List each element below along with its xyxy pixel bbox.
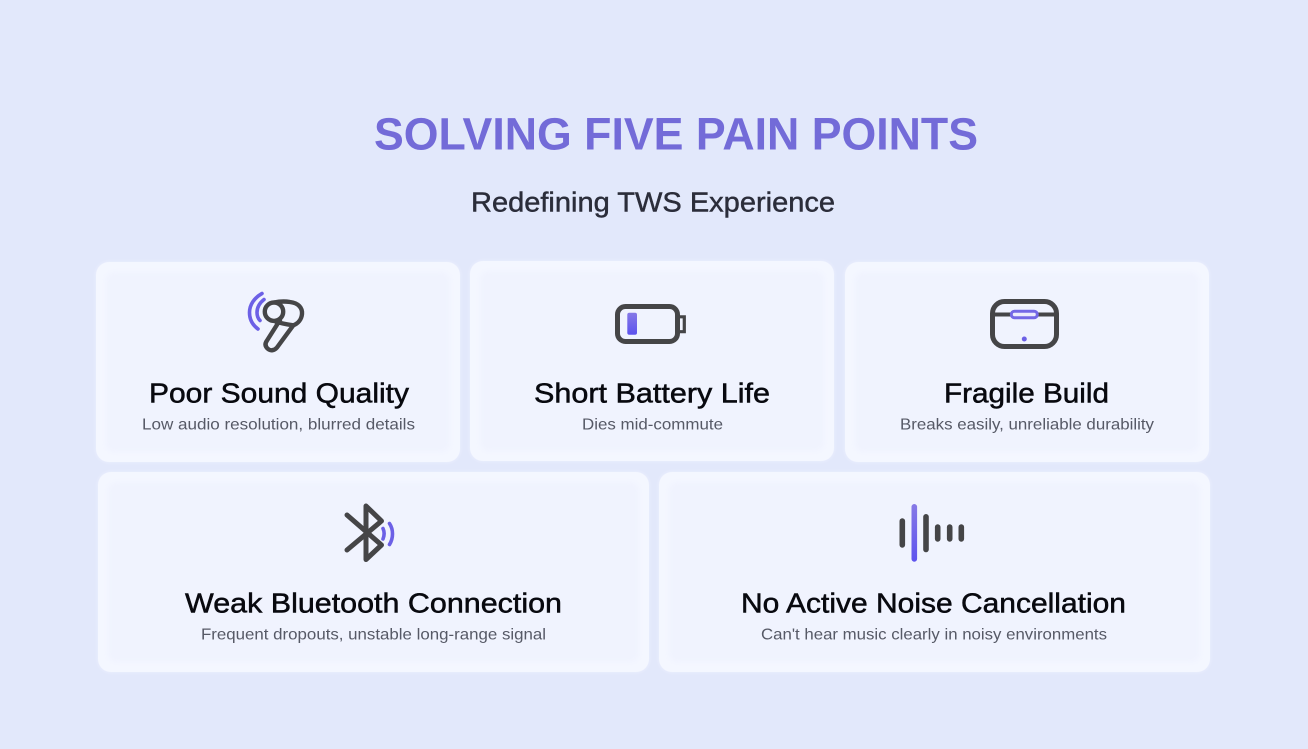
panel: poor sound quality <box>96 262 460 462</box>
heading: Poor Sound Quality <box>149 378 409 408</box>
description: Breaks easily, unreliable durability <box>900 416 1154 434</box>
title: SOLVING FIVE PAIN POINTS <box>374 108 978 160</box>
icon: sound bars <box>900 504 964 562</box>
description: Frequent dropouts, unstable long-range signal <box>201 626 546 644</box>
icon: earbud with sound waves <box>250 294 302 350</box>
panel: weak bluetooth connection <box>98 472 649 672</box>
subtitle: Redefining TWS Experience <box>471 186 835 218</box>
heading: Fragile Build <box>944 378 1109 408</box>
panel: no active noise cancellation <box>659 472 1210 672</box>
description: Can't hear music clearly in noisy environments <box>761 626 1107 644</box>
heading: Short Battery Life <box>534 378 770 408</box>
icon: low battery <box>618 306 684 342</box>
panel: short battery life <box>470 261 834 461</box>
description: Dies mid-commute <box>582 416 723 434</box>
panel: fragile build <box>845 262 1209 462</box>
description: Low audio resolution, blurred details <box>142 416 415 434</box>
heading: No Active Noise Cancellation <box>741 588 1126 618</box>
icon: bluetooth with waves <box>347 506 392 560</box>
heading: Weak Bluetooth Connection <box>185 588 562 618</box>
icon: earbud case <box>992 302 1056 346</box>
